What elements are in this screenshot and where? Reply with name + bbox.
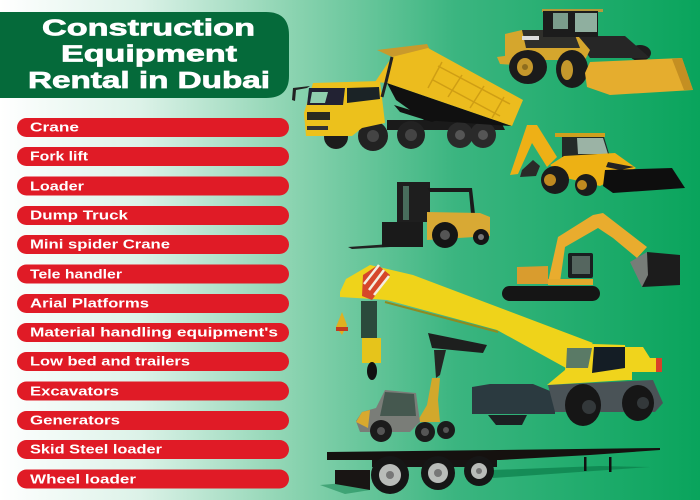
list item: Mini spider Crane bbox=[17, 235, 289, 254]
icon: telehandler loader bbox=[356, 333, 487, 442]
list item: Generators bbox=[17, 411, 289, 430]
list item: Low bed and trailers bbox=[17, 352, 289, 371]
list item: Crane bbox=[17, 118, 289, 137]
title text: Rental in Dubai bbox=[28, 67, 270, 93]
list item: Arial Platforms: Arial Platforms bbox=[30, 296, 149, 310]
list item: Excavators: Excavators bbox=[30, 384, 119, 398]
list item: Loader: Loader bbox=[30, 180, 84, 194]
equipment list bbox=[17, 118, 289, 488]
title text: Equipment bbox=[61, 40, 237, 66]
icon: forklift bbox=[348, 182, 490, 249]
list item: Excavators bbox=[17, 382, 289, 400]
crane counterweight bbox=[472, 384, 555, 414]
title panel bbox=[0, 12, 289, 98]
list item: Arial Platforms bbox=[17, 294, 289, 313]
crane boom bbox=[340, 265, 593, 368]
icon: rough terrain crane bbox=[336, 265, 663, 426]
icon: excavator bbox=[502, 213, 680, 301]
icon: dump truck bbox=[292, 44, 523, 151]
list item: Crane: Crane bbox=[30, 120, 79, 134]
crane hook lines and block bbox=[361, 301, 377, 338]
list item: Loader bbox=[17, 176, 289, 196]
list item: Mini spider Crane: Mini spider Crane bbox=[30, 238, 170, 252]
list item: Skid Steel loader: Skid Steel loader bbox=[30, 442, 162, 456]
list item: Dump Truck: Dump Truck bbox=[30, 208, 128, 222]
list item: Material handling equipment's bbox=[17, 323, 289, 342]
list item: Tele handler: Tele handler bbox=[30, 268, 122, 282]
list item: Fork lift: Fork lift bbox=[30, 150, 89, 164]
icon: backhoe loader bbox=[510, 125, 685, 196]
list item: Low bed and trailers: Low bed and trailers bbox=[30, 354, 190, 368]
list item: Wheel loader bbox=[17, 470, 289, 488]
title text: Construction bbox=[42, 14, 255, 40]
icon: wheel loader bbox=[497, 9, 693, 95]
title text bbox=[28, 14, 270, 93]
icon: flatbed trailer bbox=[320, 448, 660, 494]
list item: Dump Truck bbox=[17, 206, 289, 225]
list item: Fork lift bbox=[17, 147, 289, 166]
list item: Wheel loader: Wheel loader bbox=[30, 472, 136, 486]
list item: Material handling equipment's: Material handling equipment's bbox=[30, 326, 278, 340]
list item: Skid Steel loader bbox=[17, 440, 289, 459]
list item: Tele handler bbox=[17, 264, 289, 284]
crane chassis bbox=[548, 380, 663, 412]
list item: Generators: Generators bbox=[30, 414, 120, 428]
